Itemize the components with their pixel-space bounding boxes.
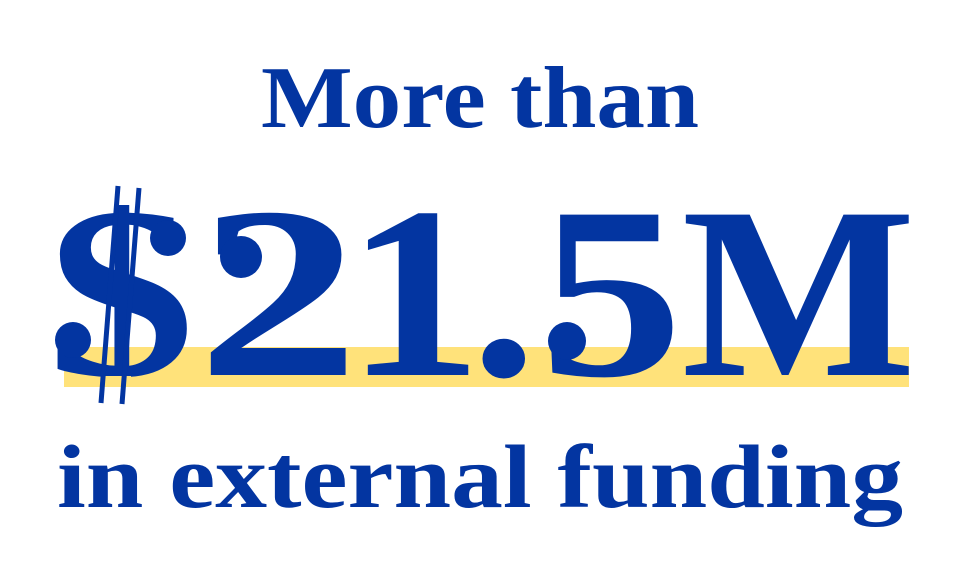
- digit 1: 1: [346, 158, 482, 429]
- letter M: M: [682, 157, 916, 429]
- figure: $21.5M: [47, 157, 916, 429]
- decimal point: .: [471, 157, 537, 428]
- caption: in external funding: in external funding: [57, 428, 903, 527]
- yellow highlight bar: [64, 347, 909, 387]
- digit 2: 2: [197, 158, 360, 429]
- dollar sign: $: [47, 157, 195, 428]
- digit 5: 5: [539, 157, 683, 428]
- heading: More than: More than: [261, 50, 699, 147]
